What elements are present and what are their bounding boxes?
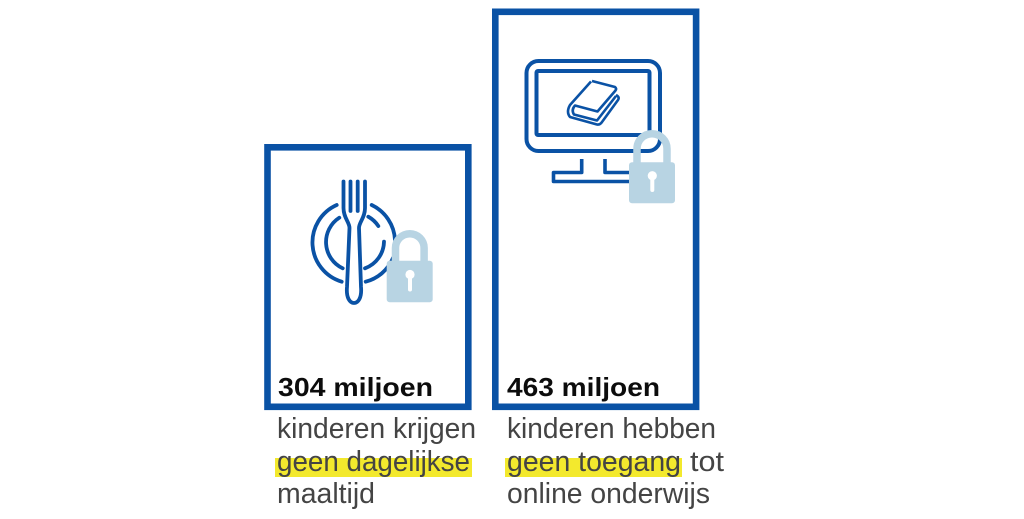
text block: right caption: geen toegang xyxy=(507,446,681,478)
text block: left caption xyxy=(275,413,476,510)
panel: 304 miljoen xyxy=(268,147,468,407)
bar frame 463 xyxy=(495,12,696,407)
text block: left caption: geen dagelijkse xyxy=(277,446,470,478)
panel: 463 miljoen xyxy=(495,12,696,407)
figure: 463 miljoen: 463 miljoen xyxy=(507,372,660,402)
text block: right caption: tot xyxy=(690,446,724,478)
highlight xyxy=(505,458,682,477)
text block: right caption: online onderwijs xyxy=(507,478,710,510)
highlight xyxy=(275,458,472,477)
icon: monitor with book xyxy=(526,61,660,182)
bar frame 304 xyxy=(268,147,468,407)
text block: left caption: maaltijd xyxy=(277,478,375,510)
icon: fork and plate xyxy=(312,182,395,303)
icon: padlock xyxy=(629,134,675,203)
text block: right caption xyxy=(505,413,724,510)
figure: 304 miljoen: 304 miljoen xyxy=(278,372,433,402)
text block: left caption: kinderen krijgen xyxy=(277,413,476,445)
text block: right caption: kinderen hebben xyxy=(507,413,716,445)
icon: padlock xyxy=(387,234,433,302)
